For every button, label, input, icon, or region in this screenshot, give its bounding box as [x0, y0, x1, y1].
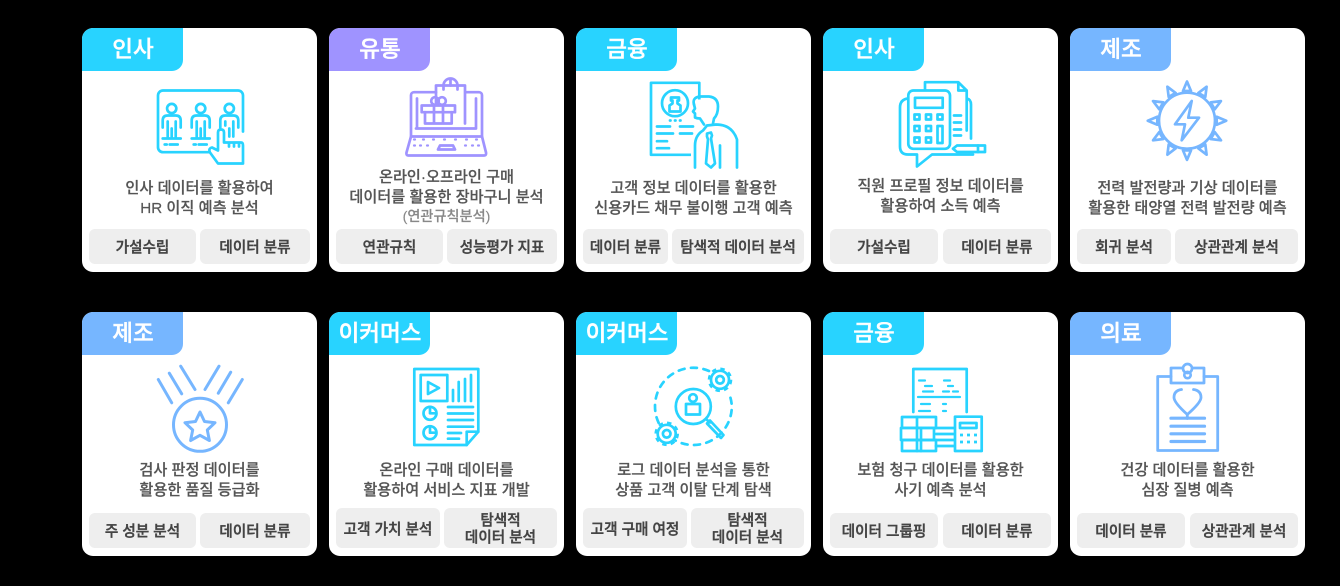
panel: insurance fraud card [823, 312, 1058, 556]
description [857, 462, 1024, 498]
icon: claim paper, money stacks and calculator [900, 368, 984, 452]
tag: 회귀 분석: 회귀 분석 [1095, 240, 1153, 256]
tag: 탐색적 데이터 분석 [672, 229, 804, 264]
tag: 고객 가치 분석 [336, 508, 440, 548]
description: HR 이직 예측 분석 [140, 200, 259, 217]
tag: 상관관계 분석: 상관관계 분석 [1194, 240, 1279, 256]
tag: 성능평가 지표: 성능평가 지표 [460, 240, 544, 256]
tab: 의료 [1070, 312, 1171, 354]
tab: 금융: 금융 [606, 37, 648, 62]
description: 활용하여 서비스 지표 개발 [363, 482, 530, 498]
tab: 제조 [1070, 28, 1171, 70]
tag: 상관관계 분석 [1175, 229, 1298, 264]
description [349, 168, 544, 224]
tab: 인사 [823, 28, 924, 70]
tag: 데이터 분류 [583, 229, 668, 264]
tag: 가설수립 [830, 229, 938, 264]
description: 온라인·오프라인 구매 [379, 168, 514, 186]
description: 사기 예측 분석 [894, 482, 987, 498]
icon: star medal with rays [156, 364, 244, 453]
tag: 데이터 분류: 데이터 분류 [590, 240, 661, 256]
tag: 성능평가 지표 [447, 229, 557, 264]
tab: 이커머스 [329, 312, 430, 354]
tag: 데이터 분류: 데이터 분류 [1095, 524, 1167, 540]
tag: 주 성분 분석: 주 성분 분석 [105, 524, 180, 540]
tag: 주 성분 분석 [89, 513, 196, 548]
description: 전력 발전량과 기상 데이터를 [1097, 180, 1278, 197]
description: 인사 데이터를 활용하여 [125, 180, 274, 197]
panel: credit default card [576, 28, 811, 272]
tag: 데이터 분류: 데이터 분류 [961, 240, 1033, 256]
panel: heart disease card [1070, 312, 1305, 556]
tag: 데이터 그룹핑 [830, 513, 938, 548]
description: 온라인 구매 데이터를 [379, 462, 514, 478]
description: (연관규칙분석) [403, 208, 490, 224]
tag: 고객 구매 여정 [583, 508, 687, 548]
tag: 데이터 분류 [943, 229, 1051, 264]
tab: 의료: 의료 [1100, 321, 1142, 346]
description: 보험 청구 데이터를 활용한 [857, 462, 1024, 478]
icon: sun with lightning bolt [1146, 80, 1228, 162]
icon: calculator and paper [898, 80, 986, 168]
tag: 데이터 분류 [943, 513, 1051, 548]
description [1120, 462, 1255, 498]
tag: 가설수립 [89, 229, 196, 264]
tag: 데이터 분류 [1077, 513, 1185, 548]
description: 심장 질병 예측 [1141, 482, 1234, 498]
tag: 연관규칙: 연관규칙 [363, 240, 416, 256]
tag: 가설수립: 가설수립 [857, 240, 911, 256]
panel: HR attrition card [82, 28, 317, 272]
icon: magnifier with gears [654, 366, 733, 446]
tab: 제조: 제조 [1100, 37, 1142, 62]
tab: 인사 [82, 28, 183, 70]
tab: 제조 [82, 312, 183, 354]
icon: people selection board [156, 89, 244, 165]
tab: 이커머스 [576, 312, 677, 354]
icon: customer profile and man [650, 82, 738, 169]
tag: 연관규칙 [336, 229, 443, 264]
panel: solar power card [1070, 28, 1305, 272]
description: 고객 정보 데이터를 활용한 [610, 180, 777, 197]
icon: report document [412, 368, 480, 446]
icon: laptop with gifts [405, 77, 488, 157]
tag: 상관관계 분석: 상관관계 분석 [1202, 524, 1286, 540]
panel: market basket card [329, 28, 564, 272]
description [594, 180, 793, 217]
panel: service metrics card [329, 312, 564, 556]
description [857, 178, 1024, 215]
tag: 고객 가치 분석: 고객 가치 분석 [344, 522, 432, 538]
tag: 탐색적 데이터 분석: 탐색적 데이터 분석 [680, 240, 796, 256]
description: 데이터를 활용한 장바구니 분석 [349, 188, 544, 206]
tab: 금융 [823, 312, 924, 354]
tab: 유통: 유통 [359, 37, 401, 62]
tag: 데이터 분류 [200, 229, 310, 264]
description: 상품 고객 이탈 단계 탐색 [615, 482, 772, 498]
description [1088, 180, 1287, 217]
panel: churn journey card [576, 312, 811, 556]
description [363, 462, 530, 498]
tag: 상관관계 분석 [1190, 513, 1298, 548]
icon: clipboard with stethoscope [1156, 362, 1220, 452]
tag: 고객 구매 여정: 고객 구매 여정 [591, 522, 679, 538]
panel: quality grading card [82, 312, 317, 556]
description: 활용한 품질 등급화 [139, 482, 260, 498]
tab: 금융: 금융 [853, 321, 895, 346]
tag: 탐색적 데이터 분석: 탐색적 [480, 513, 521, 529]
description [139, 462, 260, 498]
tag: 탐색적 데이터 분석: 탐색적 [727, 513, 768, 529]
tag: 탐색적 데이터 분석: 데이터 분석 [712, 530, 783, 546]
tab: 유통 [329, 28, 430, 70]
tag: 데이터 그룹핑: 데이터 그룹핑 [842, 524, 926, 540]
tab: 이커머스: 이커머스 [586, 321, 668, 346]
panel: income prediction card [823, 28, 1058, 272]
description [125, 180, 274, 217]
tab: 인사: 인사 [853, 37, 895, 62]
tag: 회귀 분석 [1077, 229, 1171, 264]
tag: 탐색적 데이터 분석 [691, 508, 804, 548]
description: 검사 판정 데이터를 [139, 462, 260, 478]
tag: 가설수립: 가설수립 [116, 240, 169, 256]
description: 활용한 태양열 전력 발전량 예측 [1088, 200, 1287, 217]
tab: 금융 [576, 28, 677, 70]
description: 활용하여 소득 예측 [880, 198, 1001, 215]
description: 로그 데이터 분석을 통한 [617, 462, 770, 478]
tag: 데이터 분류: 데이터 분류 [961, 524, 1033, 540]
tag: 데이터 분류: 데이터 분류 [219, 524, 291, 540]
tag: 탐색적 데이터 분석: 데이터 분석 [465, 530, 536, 546]
tab: 이커머스: 이커머스 [339, 321, 421, 346]
description: 직원 프로필 정보 데이터를 [857, 178, 1024, 195]
tag: 데이터 분류: 데이터 분류 [219, 240, 291, 256]
description: 신용카드 채무 불이행 고객 예측 [594, 200, 793, 217]
tag: 탐색적 데이터 분석 [444, 508, 557, 548]
description [615, 462, 772, 498]
tag: 데이터 분류 [200, 513, 310, 548]
description: 건강 데이터를 활용한 [1120, 462, 1255, 478]
tab: 인사: 인사 [112, 37, 154, 62]
tab: 제조: 제조 [112, 321, 154, 346]
